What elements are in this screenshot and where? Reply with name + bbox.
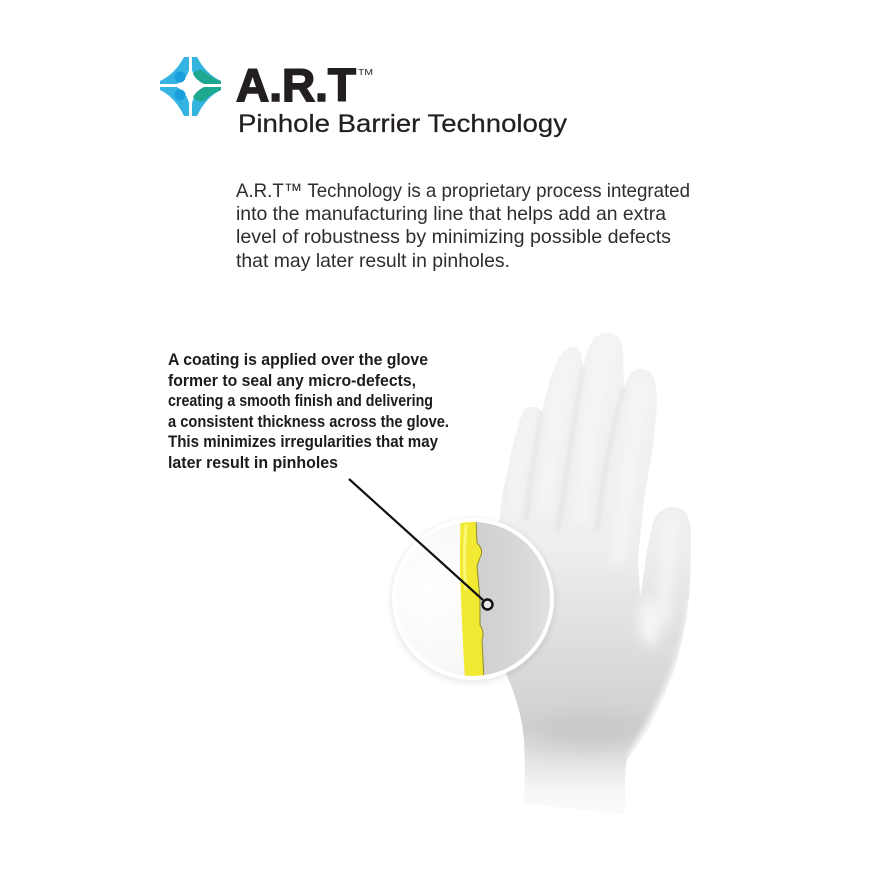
illustration: glove bbox=[498, 333, 691, 796]
intro text block: A.R.T™ Technology is a proprietary process integrated bbox=[236, 180, 690, 202]
callout text: creating a smooth finish and delivering bbox=[168, 392, 433, 410]
gray glove surface bbox=[476, 522, 550, 675]
intro text block: level of robustness by minimizing possible defects bbox=[236, 226, 671, 248]
palm highlight near thumb bbox=[639, 598, 661, 646]
callout text: later result in pinholes bbox=[168, 454, 338, 472]
leader line bbox=[349, 479, 492, 610]
intro text block: that may later result in pinholes. bbox=[236, 250, 510, 272]
right edge lightening bbox=[630, 600, 692, 760]
title: A.R.T: A.R.T bbox=[236, 59, 356, 111]
finger shading bbox=[534, 369, 624, 494]
callout text bbox=[168, 351, 449, 472]
logo: A.R.T star icon bbox=[160, 57, 221, 116]
callout text: This minimizes irregularities that may bbox=[168, 433, 439, 451]
trademark: TM bbox=[358, 68, 373, 77]
palm shadow bbox=[552, 730, 630, 749]
yellow coating layer bbox=[460, 515, 484, 680]
intro text block: into the manufacturing line that helps add an extra bbox=[236, 203, 666, 225]
callout text: a consistent thickness across the glove. bbox=[168, 413, 449, 431]
magnified detail circle bbox=[390, 510, 560, 684]
callout text: A coating is applied over the glove bbox=[168, 351, 428, 369]
intro text block bbox=[236, 180, 690, 272]
finger highlights bbox=[661, 573, 670, 618]
subtitle: Pinhole Barrier Technology bbox=[238, 110, 568, 138]
callout text: former to seal any micro-defects, bbox=[168, 372, 416, 390]
